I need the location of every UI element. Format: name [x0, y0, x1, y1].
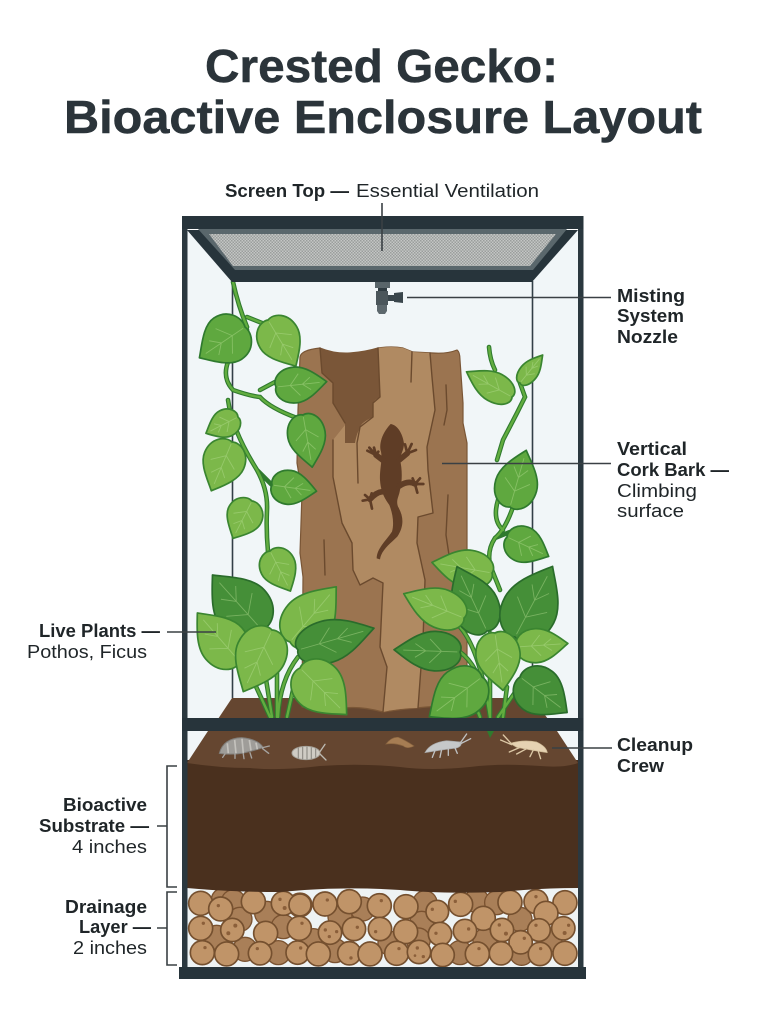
glass interior: [187, 230, 578, 968]
label: cleanup crew: Crew: [617, 756, 665, 776]
vine stems: [489, 347, 525, 590]
lid recess: [187, 230, 578, 282]
right post: [578, 220, 584, 968]
label: bioactive substrate: [39, 766, 177, 887]
bug: silverfish: [425, 734, 471, 757]
label: misting system nozzle: System: [617, 306, 684, 326]
topsoil surface: [187, 731, 578, 769]
label: cleanup crew: [552, 735, 693, 776]
bioactive substrate layer: [187, 760, 578, 893]
stems: [253, 657, 298, 717]
title: Bioactive Enclosure Layout: [64, 91, 702, 143]
title: [64, 40, 702, 143]
label: vertical cork bark: Vertical: [617, 439, 687, 459]
bug: worm: [386, 737, 414, 748]
enclosure frame: [179, 216, 586, 979]
vine leaves: [459, 359, 520, 410]
left vine: [186, 282, 331, 599]
label: misting system nozzle: [407, 286, 685, 347]
label: bioactive substrate: Bioactive: [63, 795, 147, 815]
label: live plants: Pothos, Ficus: [27, 642, 147, 662]
bark crack lines: [320, 348, 449, 712]
label: drainage layer: [65, 892, 177, 965]
stem tip below rail: [487, 731, 494, 738]
leca drainage balls: [187, 888, 578, 967]
label: misting system nozzle: Misting: [617, 286, 685, 306]
top rail: [182, 216, 584, 229]
leaves: [429, 544, 496, 592]
label: drainage layer: Layer —: [79, 917, 151, 937]
right vine: [459, 347, 556, 590]
left plant cluster: [179, 556, 380, 733]
label: vertical cork bark: [442, 439, 729, 521]
label: screen top: [225, 181, 539, 251]
cleanup crew bugs: [219, 734, 547, 760]
back frame lines: [232, 281, 532, 698]
vine leaves: [186, 306, 260, 378]
label: vertical cork bark: Cork Bark —: [617, 460, 729, 480]
light inner bark: [333, 347, 435, 712]
label: live plants: Live Plants —: [39, 621, 160, 641]
vine stems: [226, 282, 297, 552]
middle rail: [182, 718, 584, 731]
cork bark: [297, 347, 467, 712]
icon: gecko: [363, 424, 423, 559]
title: Crested Gecko:: [205, 40, 558, 92]
label: misting system nozzle: Nozzle: [617, 327, 678, 347]
stems: [460, 627, 518, 718]
label: drainage layer: Drainage: [65, 897, 147, 917]
bug: large isopod: [219, 738, 269, 759]
bug: springtail: [501, 735, 547, 759]
icon: misting nozzle: [375, 282, 403, 314]
mesh frame: [198, 229, 567, 270]
right plant cluster: [393, 544, 582, 737]
label: bioactive substrate: 4 inches: [72, 837, 147, 857]
label: cleanup crew: Cleanup: [617, 735, 693, 755]
label: live plants: [27, 621, 216, 662]
bug: small isopod: [292, 744, 326, 760]
label: screen top: Screen Top —: [225, 181, 349, 201]
hollow: [320, 348, 380, 443]
label: vertical cork bark: Climbing: [617, 481, 697, 501]
base rail: [179, 967, 586, 979]
screen mesh: [209, 234, 556, 266]
label: bioactive substrate: Substrate —: [39, 816, 149, 836]
label: drainage layer: 2 inches: [73, 938, 147, 958]
label: vertical cork bark: surface: [617, 501, 684, 521]
left post: [182, 220, 188, 968]
leaves: [191, 556, 284, 650]
upper soil surface: [218, 698, 548, 719]
label: screen top: Essential Ventilation: [356, 181, 539, 201]
